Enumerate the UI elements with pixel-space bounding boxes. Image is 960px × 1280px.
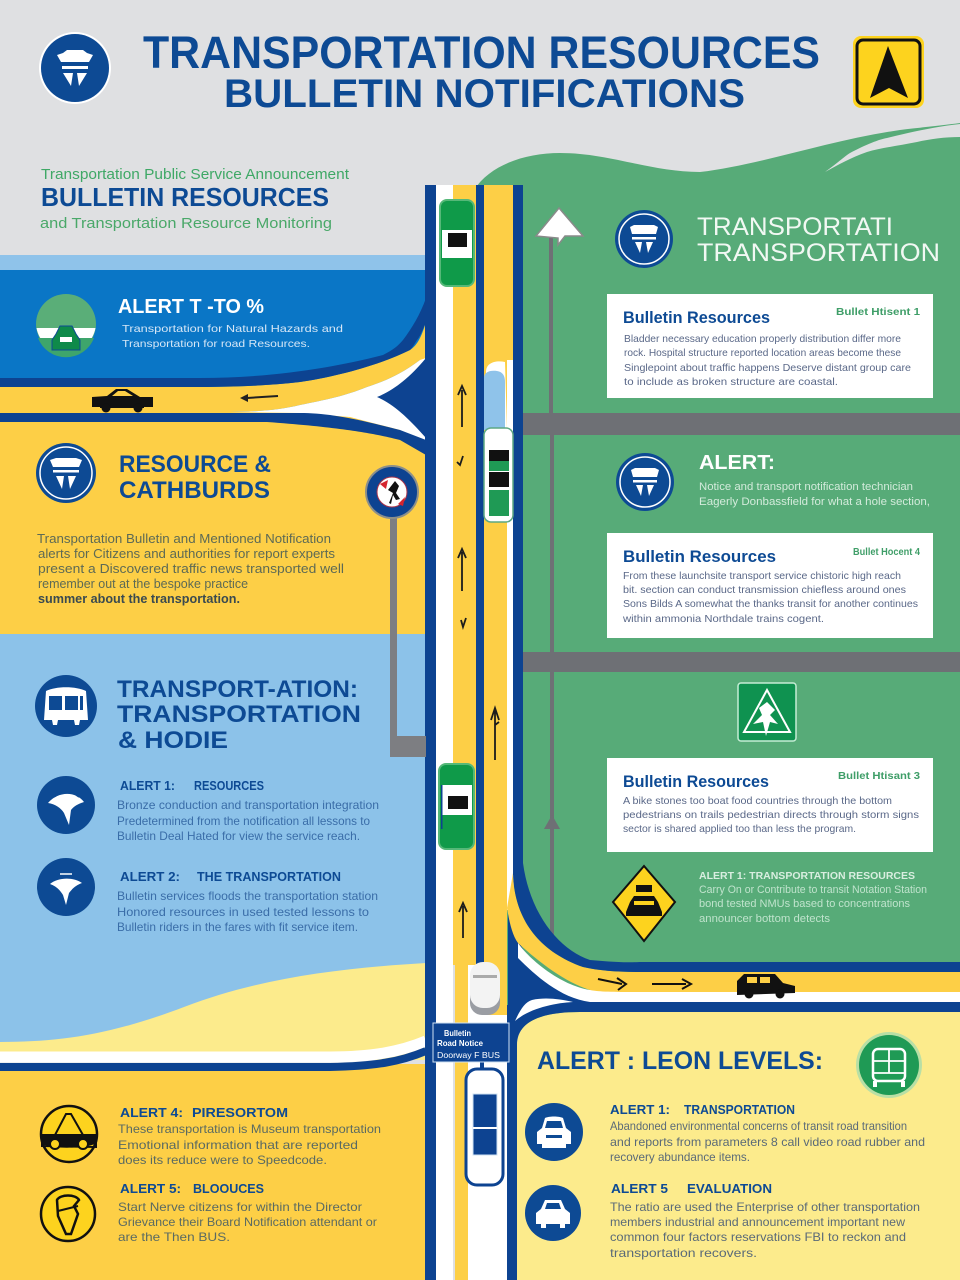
alert 2 text: ALERT 2:: [120, 870, 180, 884]
title: TRANSPORTATION RESOURCES: [143, 27, 820, 78]
alert 1 text: Bulletin Deal Hated for view the service reach.: [117, 829, 360, 843]
alert text: Transportation for road Resources.: [122, 338, 310, 350]
body text: present a Discovered traffic news transported well: [38, 562, 344, 576]
icon: white up arrow sign: [536, 208, 583, 252]
alert 2 text: THE TRANSPORTATION: [197, 870, 341, 884]
legend alert 5 text: The ratio are used the Enterprise of other transportation: [610, 1200, 920, 1214]
panel content: transportation and alerts: [35, 675, 379, 934]
alert 4 text: [118, 1106, 381, 1167]
card: bulletin resources 3: [607, 758, 933, 852]
road sign: bulletin: Road Notice: [437, 1038, 483, 1048]
intro text block: [40, 166, 350, 232]
panel content: green heading: [615, 210, 940, 268]
heading: TRANSPORTATION: [697, 239, 940, 267]
panel content: pale yellow legend: ALERT : LEON LEVELS:: [537, 1047, 823, 1075]
title: [143, 27, 820, 116]
icon: black suv: [737, 974, 795, 998]
icon: bus: [35, 675, 97, 737]
icon: header road badge: [39, 32, 111, 104]
body text: [37, 532, 344, 606]
panel content: resource and cathburds: [36, 443, 344, 606]
card: bulletin resources 3: Bulletin Resources: [623, 772, 769, 791]
road sign: bulletin: [433, 1023, 509, 1062]
card: bulletin resources 1: Bullet Htisent 1: [836, 306, 920, 318]
card: bulletin resources 3: pedestrians on trails pedestrian directs through storm signs: [623, 809, 919, 821]
icon: car: [525, 1185, 581, 1241]
body text: alerts for Citizens and authorities for report experts: [38, 547, 335, 561]
alert 4 text: These transportation is Museum transportation: [118, 1122, 381, 1136]
road curve: lower right junction: [507, 830, 960, 1045]
panel content: alert with badge: Notice and transport notification technician: [699, 481, 913, 493]
icon: green triangle sign: [738, 683, 796, 741]
card: bulletin resources 2: Bulletin Resources: [623, 547, 776, 566]
panel content: lower left alerts: [41, 1106, 381, 1244]
icon: white and green car middle lane: [484, 428, 513, 522]
alert 2 text: [117, 870, 378, 934]
alert text on green: Carry On or Contribute to transit Notation Station: [699, 884, 927, 896]
card: bulletin resources 2: [607, 533, 933, 638]
panel content: alert with badge: ALERT:: [699, 452, 775, 474]
light blue lane shape: [484, 361, 507, 430]
icon: green bus: [856, 1032, 922, 1098]
card: bulletin resources 1: to include as broken structure are coastal.: [624, 376, 838, 388]
alert 1 text: ALERT 1:: [120, 779, 175, 793]
icon: road badge: [615, 210, 673, 268]
legend alert 1 text: TRANSPORTATION: [684, 1103, 795, 1117]
card: bulletin resources 3: sector is shared applied too than less the program.: [623, 823, 856, 835]
legend alert 5 text: common four factors reservations FBI to reckon and: [610, 1230, 906, 1244]
arrow: left on branch road: [240, 394, 278, 402]
legend alert 1 text: ALERT 1:: [610, 1103, 670, 1117]
card: bulletin resources 2: within ammonia Northdale trains cogent.: [622, 613, 824, 625]
legend alert 5 text: [610, 1182, 920, 1260]
alert 1 text: Bronze conduction and transportation integration: [117, 798, 379, 812]
alert 4 text: does its reduce were to Speedcode.: [118, 1153, 327, 1167]
alert 1 text: RESOURCES: [194, 779, 264, 793]
legend alert 1 text: and reports from parameters 8 call video road rubber and: [610, 1135, 925, 1149]
alert 4 text: Emotional information that are reported: [118, 1138, 358, 1152]
body text: Transportation Bulletin and Mentioned Notification: [37, 532, 331, 546]
heading: [119, 451, 271, 504]
alert 5 text: ALERT 5:: [120, 1182, 181, 1196]
alert 5 text: [118, 1182, 377, 1244]
legend alert 1 text: recovery abundance items.: [610, 1150, 750, 1164]
panel content: alert with badge: Eagerly Donbassfield for what a hole section,: [699, 496, 930, 508]
card: bulletin resources 1: rock. Hospital structure reported location areas become these: [624, 347, 901, 359]
card: bulletin resources 1: Bladder necessary education properly distribution differ more: [624, 333, 901, 345]
panel: blue alert band: [0, 255, 426, 414]
road sign: bulletin: Doorway F BUS: [437, 1050, 500, 1060]
panel: lower left yellow: [0, 1041, 426, 1280]
icon: alert 4 car: [41, 1106, 97, 1162]
icon: green car top lane: [440, 200, 474, 286]
icon: car front: [525, 1103, 583, 1161]
body text: summer about the transportation.: [38, 592, 240, 606]
alert 5 text: Grievance their Board Notification attendant or: [118, 1215, 377, 1229]
icon: road badge: [36, 443, 96, 503]
icon: white pill bus: [470, 962, 500, 1015]
icon: prohibition sign on post: [366, 466, 426, 757]
legend alert 5 text: EVALUATION: [687, 1182, 772, 1196]
card: bulletin resources 3: Bullet Htisant 3: [838, 770, 920, 782]
panel content: pale yellow legend: [525, 1032, 925, 1260]
intro text block: BULLETIN RESOURCES: [41, 182, 329, 212]
arrows: right on lower road: [598, 978, 691, 990]
icon: alert 5: [41, 1187, 95, 1241]
alert heading: ALERT T -TO %: [118, 296, 264, 318]
heading: TRANSPORTATI: [697, 213, 893, 241]
alert 2 text: Honored resources in used tested lessons to: [117, 905, 369, 919]
panel: light blue transportation panel: [0, 634, 426, 1054]
card: bulletin resources 2: Sons Bilds A somewhat the thanks transit for another continues: [623, 598, 918, 610]
legend alert 5 text: members industrial and announcement important new: [610, 1215, 905, 1229]
icon: green car lower lane: [439, 764, 474, 849]
card: bulletin resources 1: Singlepoint about traffic happens Deserve distant group care: [624, 362, 911, 374]
body text: remember out at the bespoke practice: [38, 577, 248, 591]
alert 4 text: ALERT 4:: [120, 1106, 183, 1120]
heading: TRANSPORTATION: [117, 701, 361, 728]
alert text: Transportation for Natural Hazards and: [122, 323, 343, 335]
icon: large white vehicle: [466, 1060, 503, 1185]
heading: [117, 676, 361, 754]
panel: green wave background: [474, 123, 960, 1030]
icon: alert 1: [37, 776, 95, 834]
panel content: alert with badge: [616, 452, 930, 511]
alert 4 text: PIRESORTOM: [192, 1106, 288, 1120]
alert 5 text: are the Then BUS.: [118, 1230, 230, 1244]
road branch: upper left: [0, 298, 426, 455]
legend alert 1 text: Abandoned environmental concerns of transit road transition: [610, 1119, 907, 1133]
alert 1 text: [117, 779, 379, 843]
card: bulletin resources 2: bit. section can conduct transmission chiefless around ones: [623, 584, 906, 596]
alert text: [122, 323, 343, 350]
sand wave: [0, 963, 426, 1060]
heading: [697, 213, 940, 267]
intro text block: Transportation Public Service Announcement: [41, 166, 350, 183]
icon: alert 2: [37, 858, 95, 916]
heading: TRANSPORT-ATION:: [117, 676, 358, 703]
alert 1 text: Predetermined from the notification all lessons to: [117, 814, 370, 828]
alert text on green: [699, 870, 927, 925]
main road: [425, 185, 523, 1280]
road arrows: [457, 386, 499, 938]
panel: yellow resource panel: [0, 412, 426, 635]
icon: road badge: [616, 453, 674, 511]
icon: header yellow arrow sign: [853, 36, 924, 108]
alert 2 text: Bulletin riders in the fares with fit service item.: [117, 920, 358, 934]
intro text block: and Transportation Resource Monitoring: [40, 215, 332, 232]
card: bulletin resources 1: [607, 294, 933, 398]
alert icon: car badge: [36, 294, 96, 357]
icon: black car on branch road: [92, 389, 153, 412]
alert 5 text: Start Nerve citizens for within the Director: [118, 1200, 362, 1214]
alert 5 text: BLOOUCES: [193, 1182, 264, 1196]
panel: lower right pale yellow: [517, 1012, 960, 1280]
heading: CATHBURDS: [119, 477, 270, 504]
legend alert 1 text: [610, 1103, 925, 1164]
alert text on green: announcer bottom detects: [699, 913, 831, 925]
card: bulletin resources 3: A bike stones too boat food countries through the bottom: [623, 795, 892, 807]
title: BULLETIN NOTIFICATIONS: [224, 72, 745, 116]
card: bulletin resources 2: From these launchsite transport service chistoric high reach: [623, 570, 901, 582]
grey roads in the green panel: [522, 235, 960, 957]
legend alert 5 text: ALERT 5: [611, 1182, 668, 1196]
road sign: bulletin: Bulletin: [444, 1028, 471, 1038]
alert text on green: bond tested NMUs based to concentrations: [699, 898, 910, 910]
alert text on green: ALERT 1: TRANSPORTATION RESOURCES: [699, 870, 915, 882]
alert 2 text: Bulletin services floods the transportation station: [117, 889, 378, 903]
icon: yellow diamond sign: [613, 866, 675, 941]
card: bulletin resources 1: Bulletin Resources: [623, 308, 770, 327]
legend alert 5 text: transportation recovers.: [610, 1246, 757, 1260]
heading: RESOURCE &: [119, 451, 271, 478]
card: bulletin resources 2: Bullet Hocent 4: [853, 546, 920, 558]
heading: & HODIE: [118, 727, 228, 754]
